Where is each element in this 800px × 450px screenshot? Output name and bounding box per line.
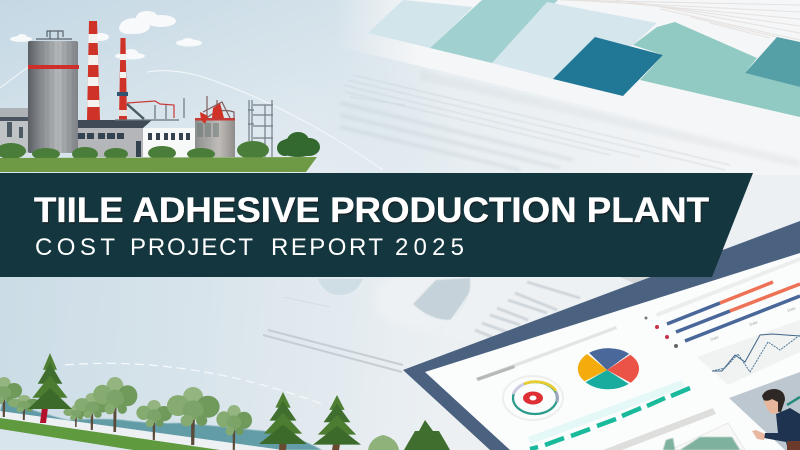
line chart panel <box>697 320 800 385</box>
small faded pie <box>318 279 363 295</box>
legend dots <box>644 316 678 348</box>
person <box>752 389 800 450</box>
tablet dashboard <box>403 221 800 450</box>
chart band: light blue left <box>368 0 473 48</box>
cropped leafy tree <box>368 435 399 450</box>
bushes <box>0 132 320 161</box>
chart block: dark blue <box>553 37 663 96</box>
cyan strip and teal dashes <box>528 380 690 449</box>
short chimney <box>117 38 128 120</box>
left building <box>0 108 28 153</box>
teal hill <box>0 400 322 450</box>
photo panel with person <box>729 372 800 450</box>
screen heading bar <box>476 326 617 381</box>
faded pie <box>413 278 470 320</box>
decorative arc lines <box>0 67 383 405</box>
pale sheet <box>440 277 660 345</box>
ruled lines on page <box>560 0 800 40</box>
subtitle: 2025 <box>395 234 464 261</box>
pine trees with trunks <box>40 400 49 423</box>
main building <box>78 120 195 157</box>
ground <box>0 157 317 172</box>
title banner <box>0 173 753 277</box>
donut gauge <box>503 376 563 420</box>
halo <box>375 270 475 330</box>
tall chimney <box>87 21 100 120</box>
tablet frame <box>403 221 800 450</box>
cropped pine <box>404 420 450 450</box>
landscape with trees <box>0 353 450 450</box>
pylons <box>248 100 273 157</box>
clouds <box>10 11 202 60</box>
lower grey bar <box>603 408 716 450</box>
title: TIILE ADHESIVE PRODUCTION PLANT <box>35 192 710 232</box>
subtitle: COST <box>35 234 115 261</box>
wheel-topped plant tank <box>195 96 235 157</box>
subtitle: REPORT <box>271 234 383 261</box>
blue and orange bars <box>667 282 800 341</box>
faded report behind the banner <box>263 270 712 372</box>
chart area: teal <box>633 22 800 117</box>
factory illustration <box>0 11 320 172</box>
leafy trees <box>0 377 22 417</box>
subtitle: PROJECT <box>130 234 253 261</box>
subtitle <box>35 234 464 261</box>
conveyor and pipework <box>115 98 184 120</box>
axis labels: Date <box>749 319 759 327</box>
faint body text lines <box>343 75 730 170</box>
chart band: teal <box>430 0 558 63</box>
top bars grey label <box>656 257 800 317</box>
axis labels: Date <box>787 305 797 313</box>
pie chart <box>577 347 640 391</box>
chart block: dark teal <box>745 37 800 87</box>
title: TIILE ADHESIVE PRODUCTION PLANT <box>34 191 709 230</box>
tablet screen <box>425 253 800 450</box>
lower chart with green area <box>663 423 745 450</box>
axis labels <box>710 305 797 342</box>
faded lines <box>475 282 580 337</box>
trees <box>0 353 450 450</box>
document page: top right report with area chart <box>300 0 800 175</box>
chart band: light blue middle <box>492 2 657 79</box>
grass strip <box>0 418 220 450</box>
blurred lower lines <box>340 103 573 170</box>
white path <box>0 411 283 450</box>
axis labels: Date <box>710 334 720 342</box>
silo <box>28 31 79 153</box>
